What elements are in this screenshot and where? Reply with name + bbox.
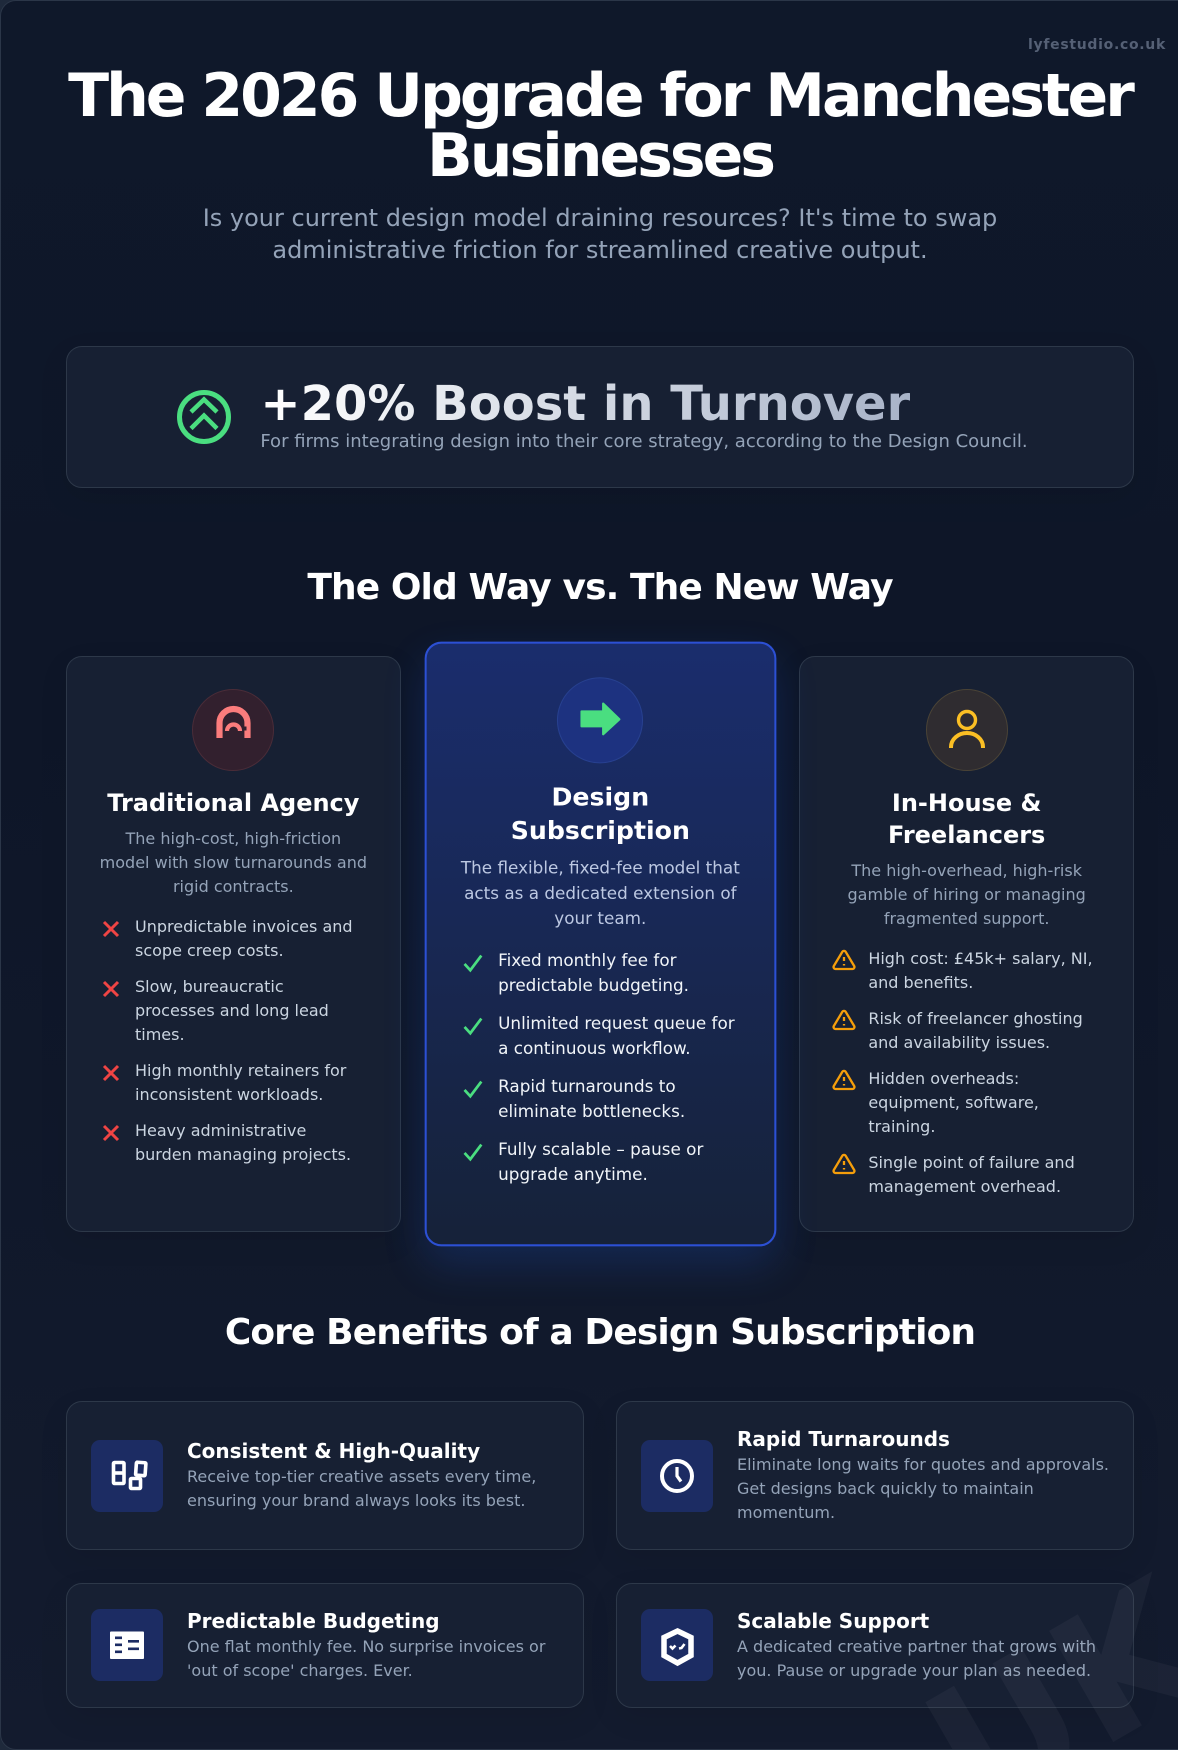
icon: ledger (91, 1609, 163, 1681)
list of risks: High cost: £45k+ salary, NI, (868, 949, 1093, 968)
stat text (260, 376, 1028, 452)
list of benefits: predictable budgeting. (498, 975, 689, 995)
card title: Traditional Agency (107, 789, 359, 817)
panel: predictable budgeting (66, 1582, 584, 1708)
benefit title: Consistent & High-Quality (187, 1439, 480, 1463)
benefit description: Get designs back quickly to maintain (737, 1479, 1034, 1498)
card description: The flexible, fixed-fee model that (461, 858, 739, 878)
icon: shield (641, 1609, 713, 1681)
list of benefits (464, 950, 735, 1184)
card description (460, 858, 740, 929)
list of drawbacks: Unpredictable invoices and (135, 917, 353, 936)
list of drawbacks: times. (135, 1025, 185, 1044)
icon: right arrow (557, 677, 643, 763)
panel: consistent and high-quality (66, 1401, 584, 1550)
list of drawbacks: Slow, bureaucratic (135, 977, 284, 996)
card title: Freelancers (888, 821, 1045, 849)
list of benefits: Fixed monthly fee for (498, 950, 676, 970)
card description (100, 829, 367, 896)
list of risks: Hidden overheads: (868, 1069, 1019, 1088)
list of risks: Single point of failure and (868, 1153, 1075, 1172)
card description: fragmented support. (884, 909, 1049, 928)
list of drawbacks: scope creep costs. (135, 941, 284, 960)
list of benefits: eliminate bottlenecks. (498, 1101, 685, 1121)
list of benefits: Fully scalable – pause or (498, 1139, 703, 1159)
card title: Subscription (510, 816, 690, 846)
heading: old vs new: The Old Way vs. The New Way (307, 567, 893, 608)
list of drawbacks: High monthly retainers for (135, 1061, 346, 1080)
title: Businesses (427, 121, 773, 191)
list of benefits: a continuous workflow. (498, 1038, 690, 1058)
benefit description: you. Pause or upgrade your plan as needed. (737, 1660, 1091, 1680)
card title (510, 782, 690, 846)
benefit description: 'out of scope' charges. Ever. (187, 1660, 413, 1680)
benefit title: Rapid Turnarounds (737, 1427, 950, 1451)
list of risks (832, 949, 1093, 1196)
card description: acts as a dedicated extension of (464, 883, 736, 903)
list of drawbacks (103, 917, 353, 1164)
list of benefits: Unlimited request queue for (498, 1013, 734, 1033)
list of benefits: Rapid turnarounds to (498, 1076, 675, 1096)
subtitle (203, 204, 997, 264)
title: The 2026 Upgrade for Manchester (68, 61, 1132, 131)
icon: person (926, 689, 1008, 771)
subtitle: administrative friction for streamlined creative output. (272, 236, 928, 264)
card description: rigid contracts. (173, 877, 294, 896)
subtitle: Is your current design model draining resources? It's time to swap (203, 204, 997, 232)
benefit text (737, 1427, 1109, 1522)
comparison columns (66, 642, 1134, 1281)
benefit description: One flat monthly fee. No surprise invoices or (187, 1636, 545, 1656)
icon: agency arch (192, 689, 274, 771)
benefit description: A dedicated creative partner that grows with (737, 1636, 1096, 1656)
card description: The high-overhead, high-risk (851, 861, 1082, 880)
title (68, 61, 1135, 191)
list of drawbacks: processes and long lead (135, 1001, 329, 1020)
benefit text (187, 1439, 536, 1510)
card description: model with slow turnarounds and (100, 853, 367, 872)
benefit title: Predictable Budgeting (187, 1608, 440, 1632)
card description: The high-cost, high-friction (126, 829, 341, 848)
list of risks: Risk of freelancer ghosting (868, 1009, 1083, 1028)
benefit description (737, 1636, 1096, 1680)
benefits grid (66, 1401, 1134, 1708)
list of drawbacks: inconsistent workloads. (135, 1085, 323, 1104)
stat headline: +20% Boost in Turnover (260, 376, 910, 432)
site url: lyfestudio.co.uk (1028, 37, 1166, 53)
card description (848, 861, 1086, 928)
benefit description (737, 1455, 1109, 1522)
icon: blocks (91, 1440, 163, 1512)
list of risks: and benefits. (868, 973, 973, 992)
benefit text (187, 1608, 546, 1680)
list of drawbacks: burden managing projects. (135, 1145, 351, 1164)
panel: rapid turnarounds (616, 1401, 1134, 1550)
list of risks: management overhead. (868, 1177, 1061, 1196)
card description: your team. (554, 909, 646, 929)
benefit description (187, 1636, 546, 1680)
icon: double chevron up (177, 390, 231, 444)
panel: traditional agency (66, 656, 401, 1232)
panel: scalable support (616, 1582, 1134, 1708)
panel: turnover stat (66, 346, 1134, 488)
panel: design subscription (424, 642, 776, 1246)
benefit description: Eliminate long waits for quotes and approvals. (737, 1455, 1109, 1474)
stat caption: For firms integrating design into their core strategy, according to the Design Council. (260, 430, 1028, 452)
list of risks: training. (868, 1117, 935, 1136)
card title: In-House & (892, 789, 1041, 817)
card description: gamble of hiring or managing (848, 885, 1086, 904)
card title (888, 789, 1045, 849)
benefit description: momentum. (737, 1503, 835, 1522)
benefit description: Receive top-tier creative assets every time, (187, 1467, 536, 1486)
list of risks: and availability issues. (868, 1033, 1050, 1052)
panel: in-house and freelancers (799, 656, 1134, 1232)
list of benefits: upgrade anytime. (498, 1164, 647, 1184)
benefit title: Scalable Support (737, 1608, 929, 1632)
benefit text (737, 1608, 1096, 1680)
heading: core benefits: Core Benefits of a Design Subscription (225, 1312, 975, 1353)
benefit description (187, 1467, 536, 1510)
card title: Design (551, 782, 649, 812)
list of risks: equipment, software, (868, 1093, 1039, 1112)
benefit description: ensuring your brand always looks its best. (187, 1491, 525, 1510)
icon: clock (641, 1440, 713, 1512)
list of drawbacks: Heavy administrative (135, 1121, 306, 1140)
